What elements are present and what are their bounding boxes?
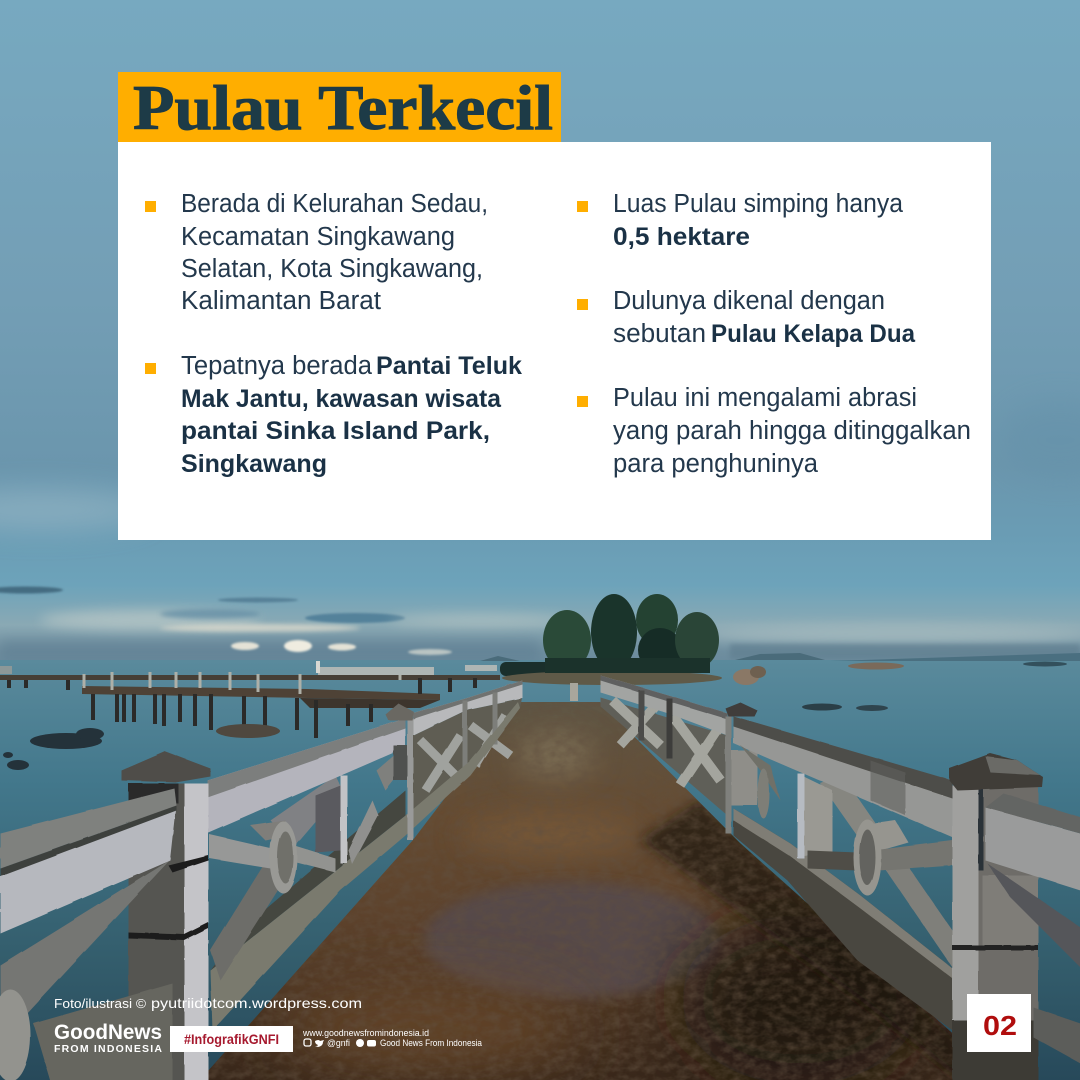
- icon: youtube: [367, 1040, 376, 1046]
- bullet: location: Selatan, Kota Singkawang,: [181, 255, 483, 283]
- bullet: exact place: [145, 352, 522, 478]
- white content panel: [118, 142, 991, 540]
- bullet: area: Luas Pulau simping hanya: [613, 190, 904, 218]
- right curb: [733, 808, 952, 1030]
- bullet: abrasion: para penghuninya: [613, 450, 819, 478]
- bullet: area: [577, 190, 904, 251]
- logo: GoodNews From Indonesia: GoodNews: [54, 1021, 162, 1044]
- bullet: exact place: Pantai Teluk: [376, 352, 522, 380]
- island with trees: [500, 594, 766, 701]
- bullet: former name: Pulau Kelapa Dua: [711, 320, 916, 348]
- right far railing section: [600, 675, 757, 833]
- bullet: former name: Dulunya dikenal dengan: [613, 287, 885, 315]
- title banner: [118, 72, 561, 143]
- left curb: [210, 702, 520, 1030]
- background: sea: [0, 653, 1080, 1080]
- bullet: abrasion: yang parah hingga ditinggalkan: [613, 417, 971, 445]
- photo credit: pyutriidotcom.wordpress.com: [151, 995, 362, 1011]
- left railing: [0, 680, 522, 1080]
- left front post: [121, 751, 210, 1080]
- left far railing section: [413, 680, 522, 825]
- website and social links: @gnfi: [327, 1038, 350, 1048]
- hashtag badge: #InfografikGNFI: [184, 1032, 279, 1047]
- bullet: exact place: Mak Jantu, kawasan wisata: [181, 385, 502, 413]
- photo credit: [54, 995, 362, 1011]
- website and social links: www.goodnewsfromindonesia.id: [302, 1028, 429, 1038]
- website and social links: Good News From Indonesia: [380, 1038, 482, 1048]
- bullet: location: [145, 190, 488, 315]
- bullet: exact place: Tepatnya berada: [181, 352, 373, 380]
- logo: GoodNews From Indonesia: FROM INDONESIA: [54, 1043, 162, 1055]
- title text: Pulau Terkecil: [133, 73, 553, 143]
- wooden pier: [0, 661, 500, 738]
- right front rail: [985, 793, 1080, 1063]
- page number: [967, 994, 1031, 1052]
- icon: facebook: [356, 1039, 364, 1047]
- background: sky: [0, 0, 1080, 665]
- rocks in water: [3, 728, 104, 770]
- bullet: location: Kecamatan Singkawang: [181, 223, 455, 251]
- bullet: exact place: Singkawang: [181, 450, 327, 478]
- bridge deck: [208, 702, 952, 1080]
- website and social links: [302, 1028, 482, 1048]
- icon: instagram: [304, 1039, 311, 1046]
- hashtag badge: [170, 1026, 293, 1052]
- icon: twitter: [315, 1040, 324, 1047]
- bullet: former name: [577, 287, 916, 348]
- right front post: [949, 753, 1043, 1080]
- left mid railing: [207, 703, 414, 980]
- bullet: former name: sebutan: [613, 320, 706, 348]
- bullet: area: 0,5 hektare: [613, 223, 750, 251]
- left lower braces: [0, 860, 172, 1080]
- bullet: exact place: pantai Sinka Island Park,: [181, 417, 490, 445]
- left front rail: [0, 788, 176, 933]
- right railing: [600, 675, 1080, 1080]
- page number: 02: [983, 1010, 1017, 1041]
- bullet: abrasion: [577, 384, 971, 478]
- bullet: location: Berada di Kelurahan Sedau,: [181, 190, 488, 218]
- bullet: abrasion: Pulau ini mengalami abrasi: [613, 384, 917, 412]
- logo: GoodNews From Indonesia: [54, 1021, 162, 1055]
- bullet: location: Kalimantan Barat: [181, 287, 381, 315]
- right mid railing: [733, 716, 952, 967]
- photo credit: Foto/ilustrasi ©: [54, 996, 146, 1011]
